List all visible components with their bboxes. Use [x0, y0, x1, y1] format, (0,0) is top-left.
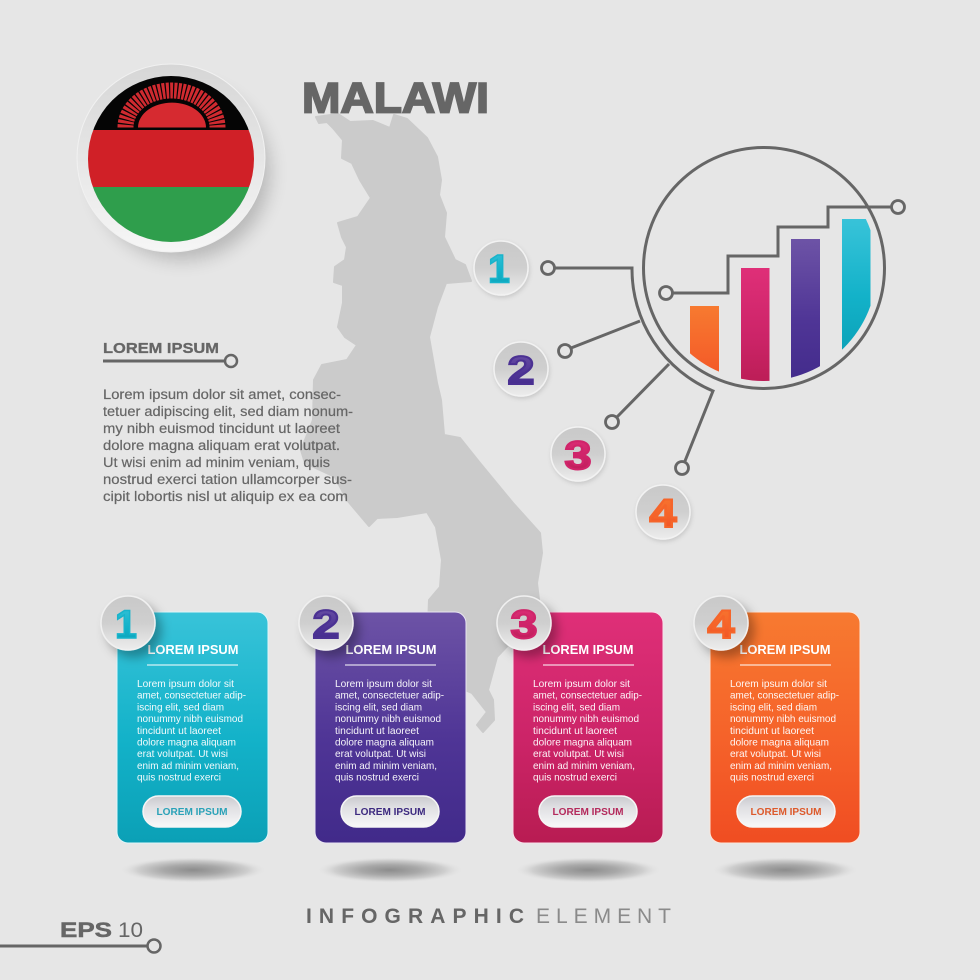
panel 1: LOREM IPSUM	[156, 807, 228, 818]
number badge 2: 2	[508, 349, 534, 393]
EPS 10 label: 10	[118, 918, 143, 942]
number badge 1: 1	[488, 248, 510, 292]
panel 4: dolore magna aliquam	[730, 738, 829, 748]
panel 1: nonummy nibh euismod	[137, 714, 243, 725]
panel 3: Lorem ipsum dolor sit	[533, 679, 630, 690]
panel 2: dolore magna aliquam	[335, 738, 434, 748]
panel 4: amet, consectetuer adip-	[730, 691, 839, 702]
panel 2: erat volutpat. Ut wisi	[335, 749, 426, 760]
panel 1: iscing elit, sed diam	[137, 702, 224, 713]
number badge 4	[636, 485, 690, 539]
panel 1: amet, consectetuer adip-	[137, 691, 246, 702]
panel 3: quis nostrud exerci	[533, 773, 617, 784]
side text block: Ut wisi enim ad minim veniam, quis	[103, 455, 330, 470]
panel 1	[101, 596, 268, 883]
panel 2: LOREM IPSUM	[346, 642, 436, 657]
flag badge	[77, 64, 270, 260]
side text block: Lorem ipsum dolor sit amet, consec-	[103, 387, 341, 402]
panel 2: tincidunt ut laoreet	[335, 726, 419, 737]
panel 2: iscing elit, sed diam	[335, 702, 422, 713]
panel 2: LOREM IPSUM	[354, 807, 426, 818]
panel 4: Lorem ipsum dolor sit	[730, 679, 827, 690]
panel 1: dolore magna aliquam	[137, 738, 236, 748]
side text block: cipit lobortis nisl ut aliquip ex ea com	[103, 489, 348, 504]
panel 3: iscing elit, sed diam	[533, 702, 620, 713]
panel 3: amet, consectetuer adip-	[533, 691, 642, 702]
panel 4: LOREM IPSUM	[750, 807, 822, 818]
panel 4: nonummy nibh euismod	[730, 714, 836, 725]
side text heading	[103, 341, 237, 367]
panel 4: tincidunt ut laoreet	[730, 726, 814, 737]
panel 2: amet, consectetuer adip-	[335, 691, 444, 702]
side text block: dolore magna aliquam erat volutpat.	[103, 438, 340, 453]
EPS 10 label	[0, 918, 160, 952]
connector lines	[542, 262, 713, 474]
panel 4: quis nostrud exerci	[730, 773, 814, 784]
panel 4: erat volutpat. Ut wisi	[730, 749, 821, 760]
panel 4: enim ad minim veniam,	[730, 761, 832, 772]
number badge 3	[551, 427, 605, 481]
panel 2	[299, 596, 466, 883]
panel 3: dolore magna aliquam	[533, 738, 632, 748]
trend line	[672, 207, 892, 293]
panel 4: 4	[708, 603, 735, 647]
panel 3	[497, 596, 663, 883]
side text block: nostrud exerci tation ullamcorper sus-	[103, 472, 352, 487]
number badge 1	[474, 241, 528, 295]
map of Malawi	[301, 114, 542, 732]
panel 1: Lorem ipsum dolor sit	[137, 679, 234, 690]
panel 4: LOREM IPSUM	[740, 642, 830, 657]
panel 3: nonummy nibh euismod	[533, 714, 639, 725]
panel 1: quis nostrud exerci	[137, 773, 221, 784]
EPS 10 label: EPS	[60, 918, 112, 942]
number badge 3: 3	[564, 434, 592, 478]
panel 1: erat volutpat. Ut wisi	[137, 749, 228, 760]
panel 4	[694, 596, 860, 883]
panel 2: Lorem ipsum dolor sit	[335, 679, 432, 690]
panel 1: enim ad minim veniam,	[137, 761, 239, 772]
panel 2: quis nostrud exerci	[335, 773, 419, 784]
side text block: tetuer adipiscing elit, sed diam nonum-	[103, 404, 353, 419]
panel 1: tincidunt ut laoreet	[137, 726, 221, 737]
footer caption: INFOGRAPHIC	[306, 905, 524, 928]
panel 2: nonummy nibh euismod	[335, 714, 441, 725]
panel 3: 3	[510, 603, 538, 647]
panel 3: enim ad minim veniam,	[533, 761, 635, 772]
side text block	[103, 387, 353, 504]
panel 4: iscing elit, sed diam	[730, 702, 817, 713]
side text block: my nibh euismod tincidunt ut laoreet	[103, 421, 340, 436]
number badge 2	[494, 342, 548, 396]
panel 1: 1	[115, 603, 137, 647]
side text heading: LOREM IPSUM	[103, 341, 219, 357]
flag of Malawi	[88, 76, 254, 242]
panel 3: erat volutpat. Ut wisi	[533, 749, 624, 760]
footer caption	[306, 905, 671, 928]
title: MALAWI	[302, 74, 489, 122]
number badge 4: 4	[650, 492, 677, 536]
panel 3: tincidunt ut laoreet	[533, 726, 617, 737]
panel 2: enim ad minim veniam,	[335, 761, 437, 772]
panel 1: LOREM IPSUM	[148, 642, 238, 657]
panel 3: LOREM IPSUM	[552, 807, 624, 818]
footer caption: ELEMENT	[536, 905, 671, 928]
bars	[690, 219, 870, 396]
magnifier bar chart	[644, 148, 904, 396]
panel 3: LOREM IPSUM	[542, 642, 634, 657]
panel 2: 2	[312, 603, 340, 647]
